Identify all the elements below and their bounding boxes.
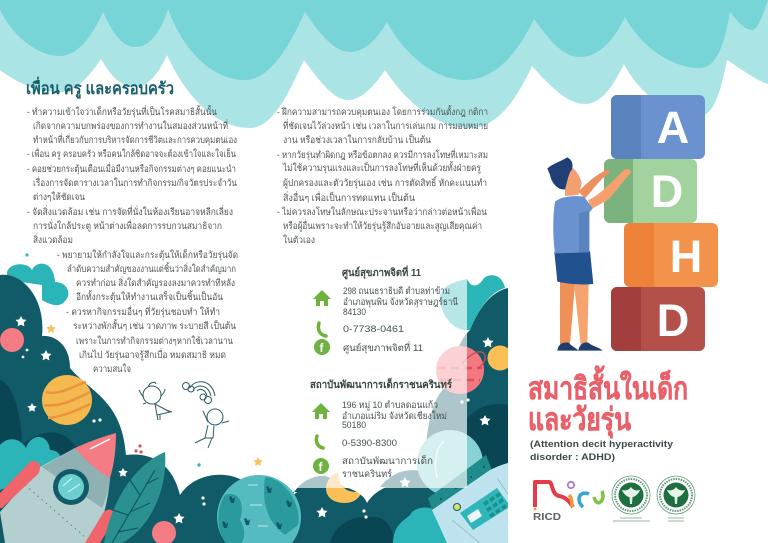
- address: อำเภอพุนพิน จังหวัดสุราษฎร์ธานี: [343, 296, 459, 308]
- doodle: rainbow: [182, 382, 215, 404]
- gold circle: [488, 346, 508, 370]
- text block: left column: [27, 105, 238, 374]
- text block: left column: เกินไป วัยรุ่นอาจรู้สึกเบื่อ หมดสมาธิ หมด: [79, 348, 226, 361]
- logo: department emblem 2: [657, 476, 695, 521]
- address: 84130: [343, 306, 366, 317]
- block A: [611, 95, 705, 159]
- crescent moon: [326, 472, 363, 503]
- block D red: D: [657, 295, 689, 346]
- floating decorations: [25, 253, 263, 467]
- text block: middle column: ผู้ปกครองและตัววัยรุ่นเอง เช่น การตัดสิทธิ์ หักคะแนนทำ: [283, 175, 487, 189]
- title: และวัยรุ่น: [528, 402, 631, 439]
- darker patch bottom: [330, 517, 395, 543]
- white notch in dark band: [345, 487, 386, 503]
- logo: RICD: RICD: [533, 511, 561, 523]
- logo: RICD: [533, 482, 603, 523]
- teal cloud top left: [7, 264, 68, 305]
- block H: [624, 223, 718, 287]
- address: อำเภอแม่ริม จังหวัดเชียงใหม่: [342, 410, 447, 421]
- doodle: boy: [195, 409, 229, 448]
- top scalloped cloud banner: [0, 0, 768, 128]
- block A: A: [657, 102, 689, 153]
- neck and face: [565, 167, 582, 196]
- text block: middle column: - หากวัยรุ่นทำผิดกฎ หรือข้อตกลง ควรมีการลงโทษที่เหมาะสม: [277, 148, 488, 161]
- darker patch left: [0, 380, 76, 456]
- text block: left column: - เพื่อน ครู ครอบครัว หรือคนใกล้ชิดอาจจะต้องเข้าใจและใจเย็น: [27, 147, 236, 160]
- red planet: [436, 346, 485, 394]
- text block: left column: ระหว่างพักสั้นๆ เช่น วาดภาพ ระบายสี เป็นต้น: [73, 319, 237, 331]
- shoes: [557, 342, 579, 351]
- subtitle: [530, 439, 674, 463]
- block D green: [604, 159, 697, 223]
- text block: middle column: สิ่งอื่นๆ เพื่อเป็นการทดแทน เป็นต้น: [283, 191, 416, 203]
- text block: left column: - ควรหากิจกรรมอื่นๆ ที่วัยรุ่นชอบทำ ให้ทำ: [66, 305, 220, 318]
- block D green: D: [651, 166, 683, 217]
- shirt: [553, 196, 593, 253]
- pale hills above the band: [292, 470, 425, 493]
- dark hills left and bottom: [0, 275, 467, 543]
- text block: left column: อีกทั้งกระตุ้นให้ทำงานเสร็จเป็นชิ้นเป็นอัน: [76, 290, 224, 303]
- icon: home: [312, 403, 330, 419]
- block D red: [611, 287, 705, 351]
- leaf: [104, 452, 165, 543]
- subtitle: disorder : ADHD): [530, 452, 615, 463]
- shorts: [554, 251, 593, 285]
- address: ศูนย์สุขภาพจิตที่ 11: [343, 341, 423, 354]
- address: 50180: [342, 419, 366, 430]
- contact heading: ศูนย์สุขภาพจิตที่ 11: [342, 265, 421, 280]
- contact: rajanagarindra institute: [310, 377, 452, 479]
- contact: mental health center 11: [313, 265, 459, 355]
- pink circle bottom: [152, 521, 176, 543]
- hair: [547, 157, 573, 189]
- text block: left column: ความสนใจ: [93, 363, 131, 374]
- icon: phone: [318, 323, 326, 336]
- stars and dots: [16, 316, 494, 523]
- arms: [578, 169, 609, 198]
- icon: facebook: [314, 339, 330, 355]
- text block: left column: - จัดสิ่งแวดล้อม เช่น การจัดที่นั่งในห้องเรียนอาจหลีกเลี่ยง: [27, 205, 233, 217]
- icon: home: [313, 290, 331, 306]
- rocket: [0, 433, 116, 543]
- text block: middle column: ไม่ใช้ความรุนแรงและเป็นการลงโทษที่เห็นด้วยทั้งฝ่ายครู: [282, 161, 481, 174]
- subtitle: (Attention decit hyperactivity: [530, 439, 674, 450]
- teal cloud behind rocket: [0, 437, 61, 490]
- address: [342, 399, 447, 479]
- text block: left column: เพราะในการทำกิจกรรมต่างๆหากใช้เวลานาน: [76, 335, 234, 346]
- contact heading: สถาบันพัฒนาการเด็กราชนครินทร์: [310, 377, 452, 391]
- pink circle left: [0, 328, 24, 352]
- address: สถาบันพัฒนาการเด็ก: [342, 454, 433, 466]
- legs: [560, 282, 575, 345]
- text block: left column: - คอยช่วยกระตุ้นเตือนเมื่อมีงานหรือกิจกรรมต่างๆ คอยแนะนำ: [27, 162, 236, 175]
- logo: department emblem 1: [612, 476, 650, 521]
- darker patch right: [467, 404, 508, 469]
- astronaut suit with keypad: [432, 463, 508, 543]
- title: สมาธิสั้นในเด็ก: [528, 365, 688, 406]
- address: 298 ถนนธราธิบดี ตำบลท่าข้าม: [343, 285, 450, 296]
- text block: left column: - ทำความเข้าใจว่าเด็กหรือวัยรุ่นที่เป็นโรคสมาธิสั้นนั้น: [27, 105, 218, 118]
- teal cloud bottom: [393, 508, 447, 543]
- teal cloud right: [440, 275, 505, 330]
- space illustration background: [0, 245, 512, 543]
- icon: facebook: [313, 458, 329, 474]
- text block: left column: การนั่งใกล้ประตู หน้าต่างเพื่อลดการรบกวนสมาธิจาก: [33, 219, 222, 232]
- text block: left column: ทำหน้าที่เกี่ยวกับการบริหารจัดการชีวิตและการควบคุมตนเอง: [33, 133, 237, 146]
- text block: middle column: - ไม่ควรลงโทษในลักษณะประจานหรือว่ากล่าวต่อหน้าเพื่อน: [277, 205, 488, 217]
- text block: middle column: - ฝึกความสามารถควบคุมตนเอง โดยการร่วมกันตั้งกฎ กติกา: [277, 105, 488, 118]
- address: [343, 285, 459, 354]
- text block: middle column: งาน หรือช่วงเวลาในการกลับบ้าน เป็นต้น: [283, 133, 432, 145]
- soft white panel over contact area: [297, 279, 467, 488]
- icon: phone: [316, 436, 323, 448]
- text block: middle column: [277, 105, 488, 245]
- text block: middle column: หรือผู้อื่นเพราะจะทำให้วัยรุ่นรู้สึกอับอายและสูญเสียคุณค่า: [283, 219, 482, 232]
- text block: middle column: ในตัวเอง: [283, 234, 315, 245]
- earth: [217, 475, 301, 543]
- person stacking blocks: [547, 157, 631, 351]
- astronaut helmet: [417, 430, 492, 510]
- orange striped planet: [42, 375, 92, 425]
- dark hump behind planet: [426, 288, 508, 440]
- text block: left column: สิ่งแวดล้อม: [33, 233, 73, 245]
- heading: friends teachers family: เพื่อน ครู และครอบครัว: [26, 76, 174, 100]
- address: 0-5390-8300: [342, 437, 397, 448]
- text block: left column: ต่างๆให้ชัดเจน: [33, 191, 86, 202]
- address: ราชนครินทร์: [342, 468, 392, 479]
- text block: left column: เกิดจากความบกพร่องของการทำงานในสมองส่วนหน้าที่: [33, 119, 228, 131]
- text block: left column: - พยายามให้กำลังใจและกระตุ้นให้เด็กหรือวัยรุ่นจัด: [57, 248, 238, 261]
- doodle: girl: [139, 382, 172, 420]
- icon: facebook: f: [320, 341, 324, 355]
- icon: facebook: f: [318, 460, 324, 474]
- text block: left column: ควรทำก่อน สิ่งใดสำคัญรองลงมาควรทำทีหลัง: [76, 276, 235, 288]
- address: 0-7738-0461: [343, 323, 404, 334]
- ADHD letter blocks: [604, 95, 718, 351]
- text block: middle column: ที่ชัดเจนไว้ล่วงหน้า เช่น เวลาในการเล่นเกม การมอบหมาย: [283, 119, 488, 131]
- text block: left column: เรื่องการจัดตารางเวลาในการทำกิจกรรม/กิจวัตรประจำวัน: [33, 176, 238, 188]
- block H: H: [670, 231, 702, 282]
- title: [528, 365, 688, 439]
- text block: left column: ลำดับความสำคัญของงานแต่ชิ้นว่าสิ่งใดสำคัญมาก: [67, 262, 236, 274]
- address: 196 หมู่ 10 ตำบลดอนแก้ว: [342, 399, 438, 411]
